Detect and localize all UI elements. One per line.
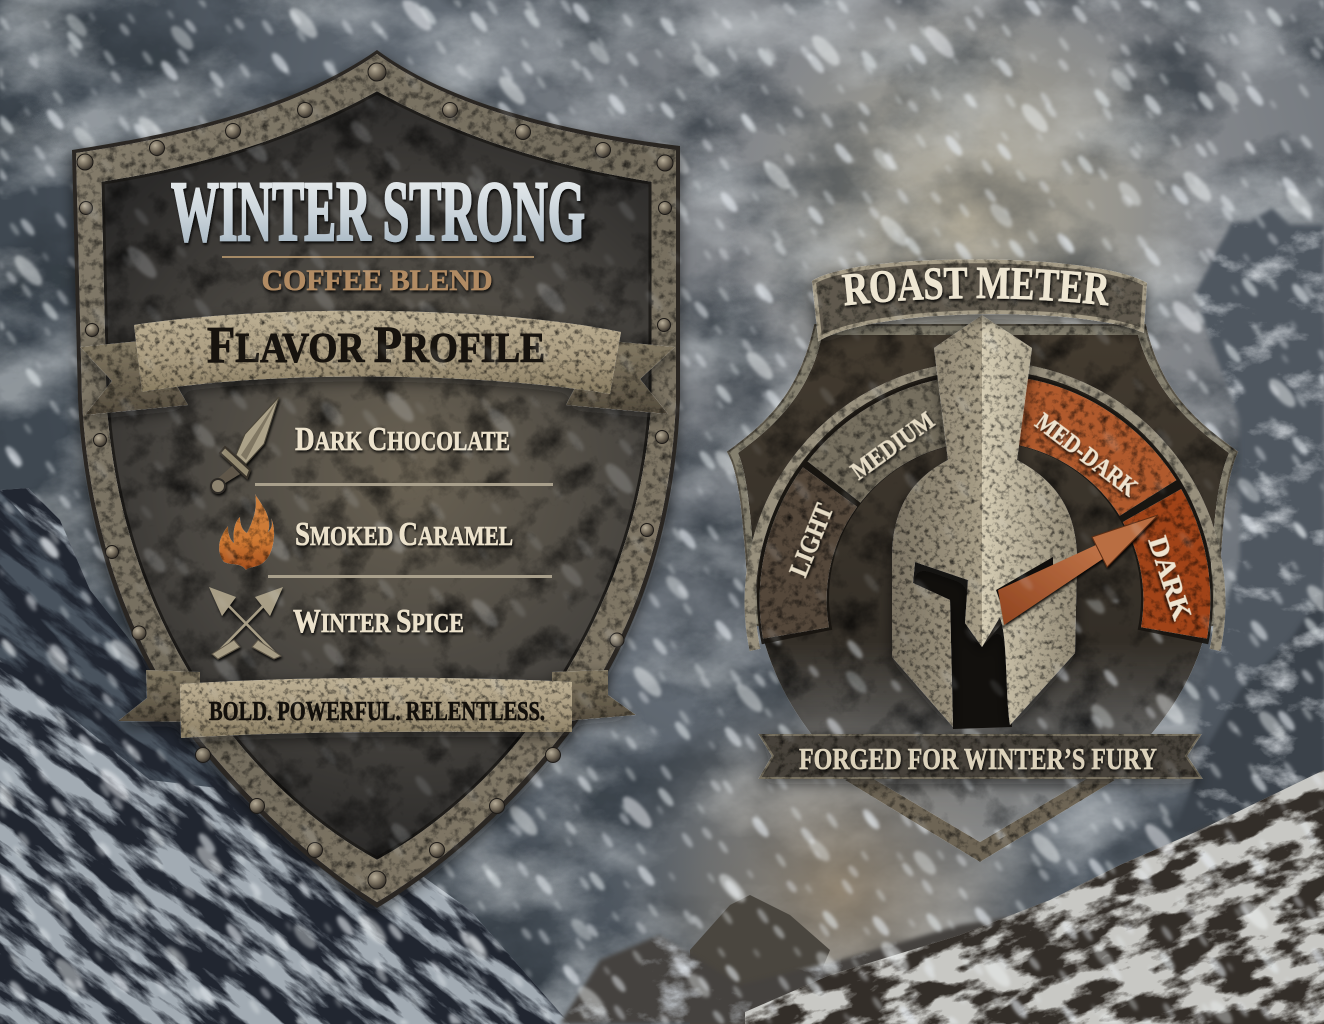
banner body bbox=[760, 735, 1201, 778]
label: Dark Chocolate: DARK CHOCOLATE bbox=[295, 421, 510, 458]
gauge label: med-dark: MED-DARK bbox=[1030, 408, 1143, 502]
panel: roast meter shield bbox=[726, 254, 1238, 862]
snowy slope left bbox=[0, 480, 600, 1024]
segment: medium bbox=[834, 411, 952, 482]
mid dark ridge bbox=[560, 780, 1324, 1024]
flavor item: smoked caramel bbox=[219, 494, 513, 570]
tagline tail left bbox=[118, 670, 200, 722]
divider under title bbox=[222, 256, 534, 258]
helmet face opening bbox=[913, 562, 1012, 729]
ribbon: tagline bbox=[118, 670, 636, 738]
crest rim bbox=[728, 325, 1237, 625]
snow on plate bbox=[126, 120, 650, 844]
ribbon tail right bbox=[566, 340, 675, 414]
snowy ridge right bbox=[740, 760, 1324, 1024]
ribbon body bbox=[814, 261, 1145, 338]
ribbon: flavor profile bbox=[80, 311, 675, 415]
segment: med-dark bbox=[1018, 411, 1148, 498]
divider bbox=[268, 575, 552, 578]
gauge label: medium: MEDIUM bbox=[846, 407, 940, 485]
gauge rim bbox=[750, 367, 1220, 650]
icon: spartan helmet bbox=[892, 315, 1077, 727]
shield rim texture bbox=[76, 54, 676, 902]
helmet eye slit bbox=[996, 557, 1053, 604]
segment: light bbox=[793, 487, 830, 633]
title: Winter Strong: WINTER STRONG bbox=[171, 163, 585, 259]
small dark hill centre bbox=[690, 895, 830, 1024]
gauge label: dark: DARK bbox=[1142, 532, 1198, 624]
ribbon body bbox=[134, 311, 621, 394]
ribbon tail left bbox=[80, 340, 188, 415]
arrow head bbox=[1092, 515, 1158, 567]
subtitle: Coffee Blend: COFFEE BLEND bbox=[262, 264, 492, 297]
segment: dark bbox=[1152, 506, 1177, 633]
snow over crest plate bbox=[772, 598, 1187, 840]
flavor item: winter spice bbox=[209, 587, 464, 659]
tagline text: BOLD. POWERFUL. RELENTLESS. bbox=[209, 696, 545, 726]
background: snowy mountains bbox=[0, 208, 1324, 1024]
gauge label: light: LIGHT bbox=[784, 500, 839, 581]
far peak right bbox=[1190, 208, 1324, 830]
shield inner plate bbox=[103, 93, 650, 858]
helmet left half bbox=[892, 315, 982, 727]
banner: forged for winter's fury bbox=[760, 735, 1201, 778]
gauge segments bbox=[793, 411, 1177, 633]
ribbon: roast meter bbox=[814, 261, 1145, 338]
icon: flame bbox=[219, 494, 274, 570]
rivets bbox=[77, 63, 673, 889]
helmet right half bbox=[982, 315, 1077, 725]
label: Smoked Caramel: SMOKED CARAMEL bbox=[295, 516, 513, 553]
arrow shaft bbox=[998, 545, 1104, 625]
tagline tail right bbox=[552, 670, 636, 722]
heading: Roast Meter: ROAST METER bbox=[842, 267, 1111, 309]
flavor item: dark chocolate bbox=[211, 397, 510, 493]
label: Winter Spice: WINTER SPICE bbox=[293, 603, 464, 640]
icon: sword bbox=[211, 397, 279, 493]
shield metal rim bbox=[72, 50, 680, 908]
mid ridge right bbox=[1175, 590, 1324, 860]
icon: crossed arrows bbox=[209, 587, 283, 659]
tagline body bbox=[180, 678, 572, 738]
arrow pointer bbox=[998, 515, 1158, 625]
divider bbox=[255, 483, 553, 486]
ribbon heading: Flavor Profile: FLAVOR PROFILE bbox=[207, 317, 545, 374]
crest inner plate bbox=[738, 335, 1229, 850]
panel: flavor profile shield bbox=[72, 50, 680, 908]
crest chevron tip bbox=[845, 772, 1115, 862]
gauge recess bbox=[793, 406, 1177, 637]
banner text: FORGED FOR WINTER’S FURY bbox=[799, 741, 1157, 776]
